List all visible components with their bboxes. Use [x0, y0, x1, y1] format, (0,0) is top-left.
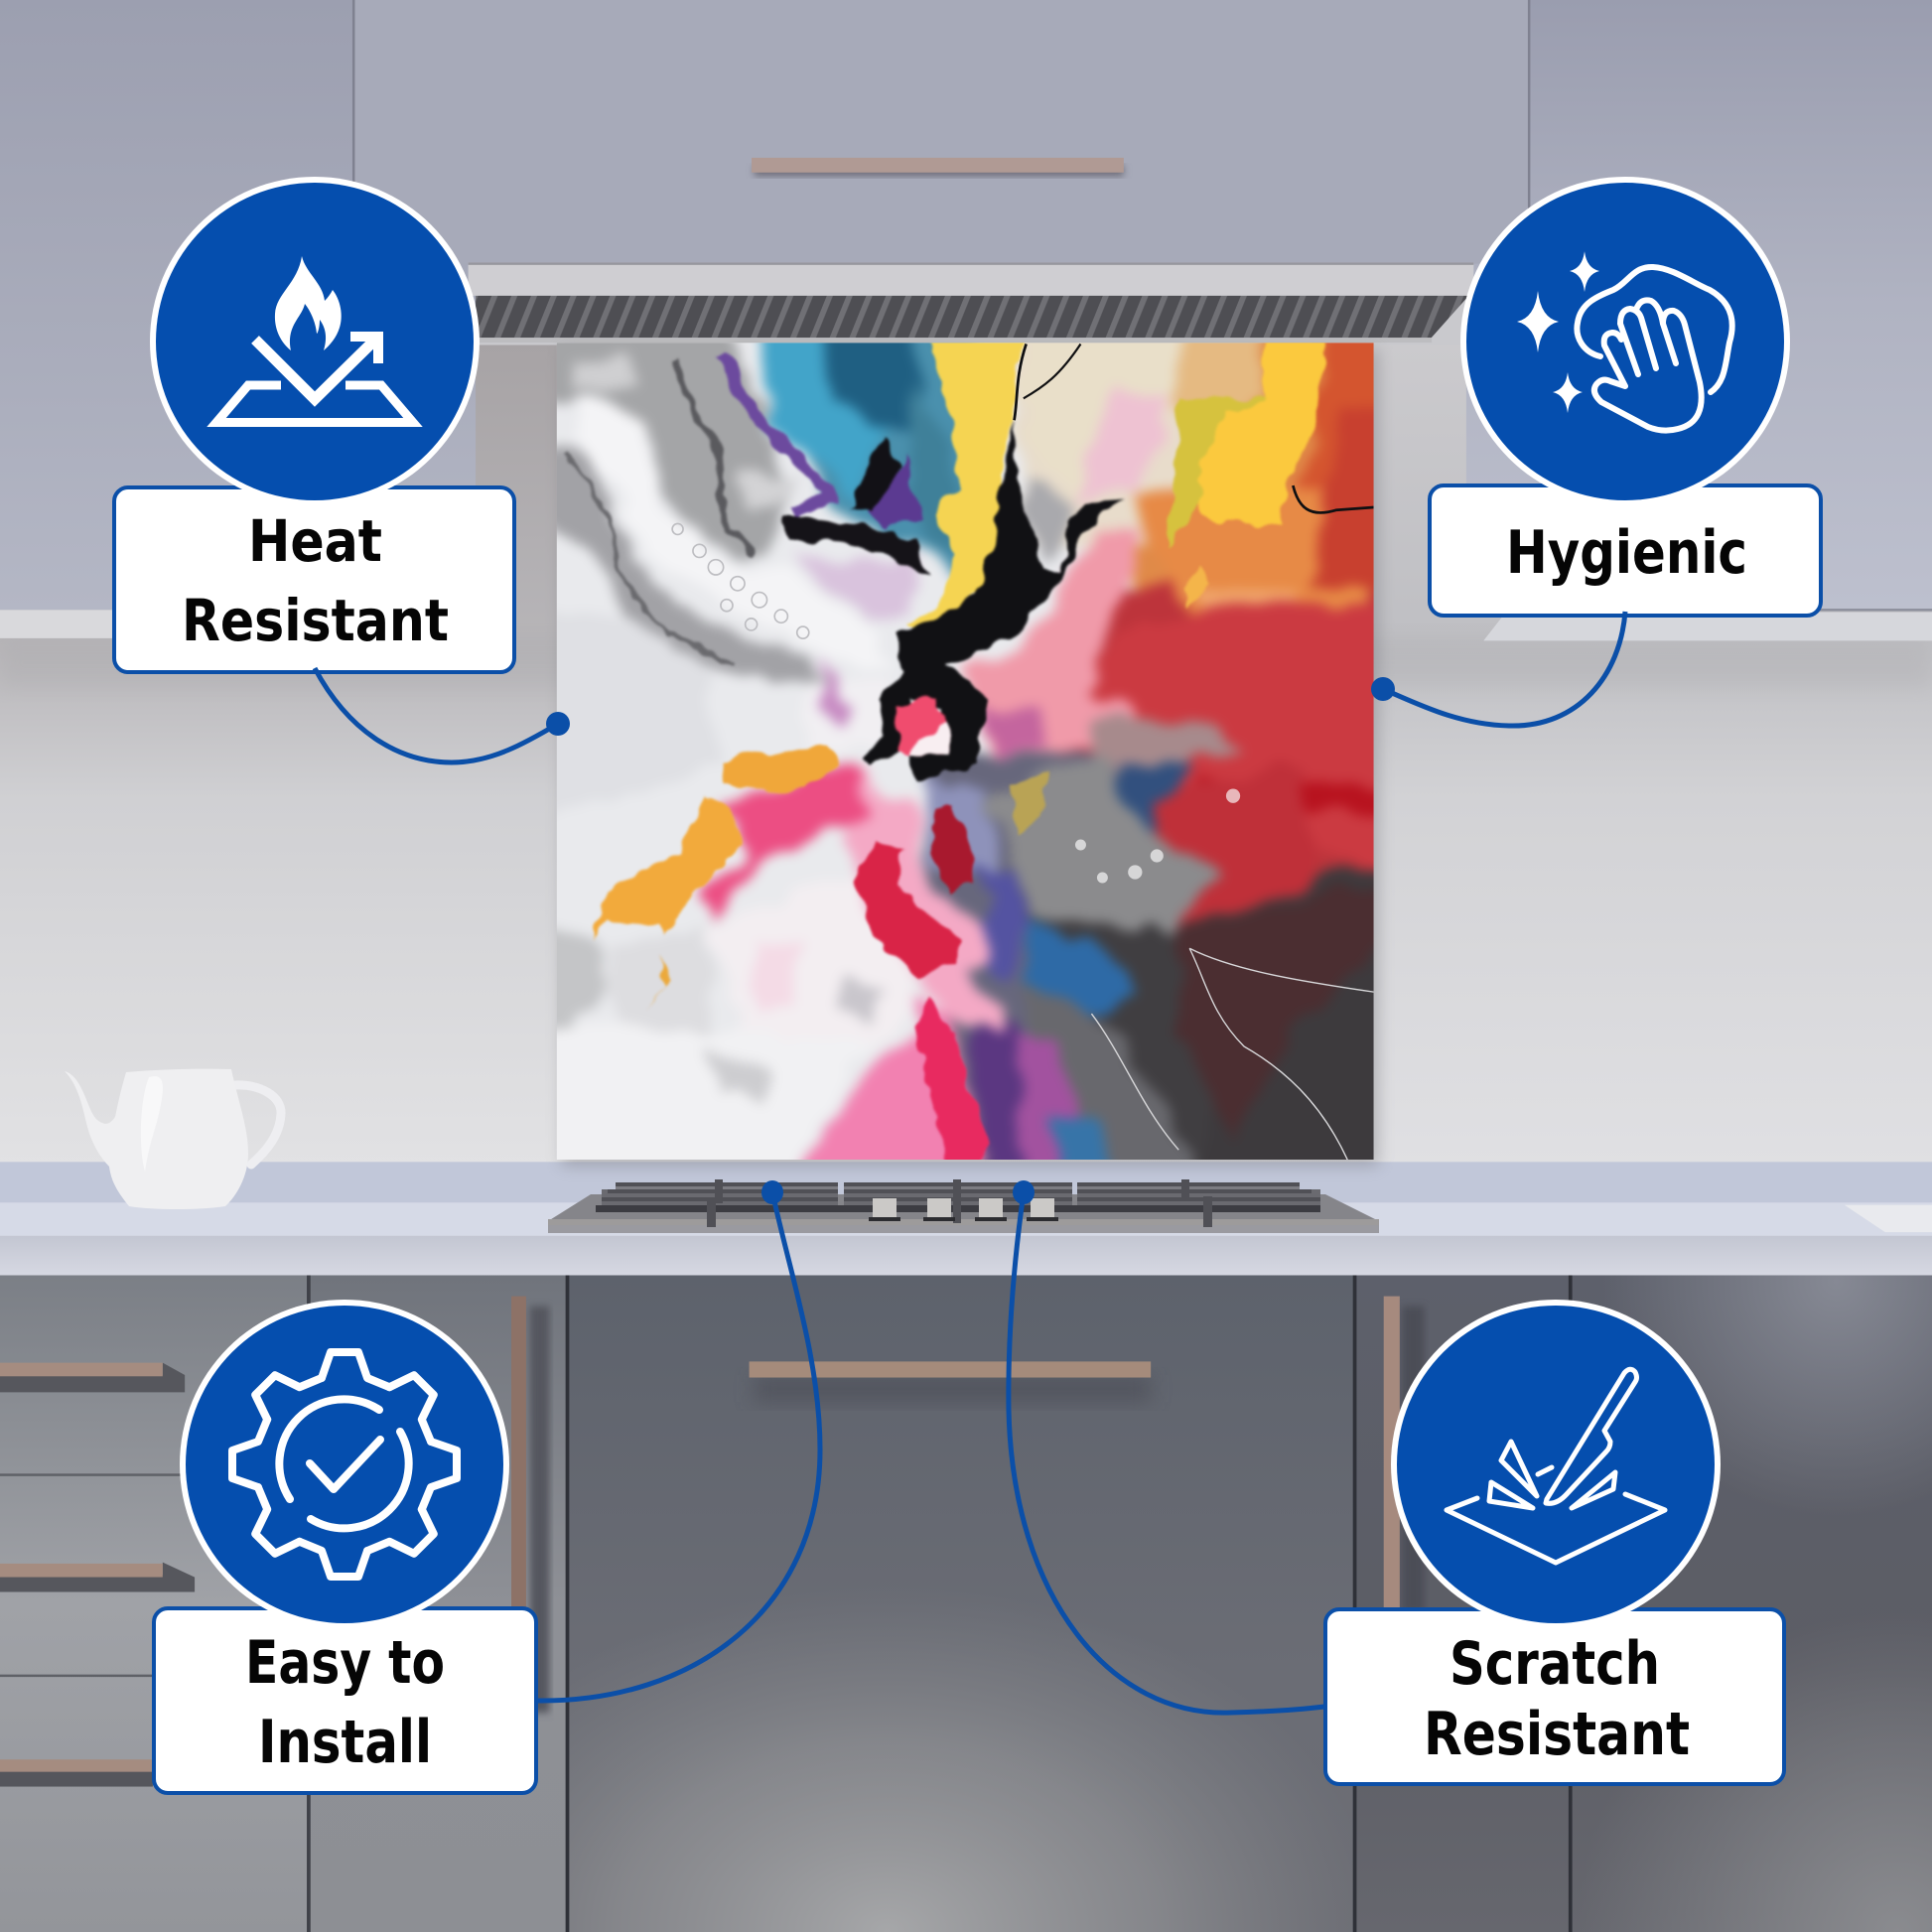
- label box: Hygienic: [1506, 518, 1747, 588]
- painting: sharp pours and veins: [563, 306, 1331, 1210]
- icon: knife scratching surface: [1391, 1300, 1721, 1629]
- countertop: [0, 1162, 1932, 1276]
- label box: Resistant: [1424, 1700, 1690, 1769]
- cooker hood: [469, 262, 1473, 343]
- label box: Resistant: [182, 587, 449, 654]
- icon: hand wiping with sparkles: [1460, 177, 1790, 506]
- upper cabinets: [0, 0, 1932, 640]
- label box: Heat: [248, 507, 382, 575]
- painting: large colour fields: [556, 343, 1374, 1160]
- connector arrow: [1371, 612, 1625, 726]
- connector arrow: [315, 668, 570, 762]
- icon: gear with check mark: [180, 1300, 509, 1629]
- hob: [548, 1179, 1379, 1233]
- callout: Hygienic: [1371, 177, 1821, 726]
- label box: [154, 1608, 536, 1793]
- label box: [1430, 485, 1821, 616]
- icon: flame on surface with deflection arrow: [150, 177, 480, 506]
- wall: [0, 345, 986, 1171]
- callout: Easy to Install: [154, 1180, 820, 1793]
- callout: Heat Resistant: [114, 177, 570, 762]
- connector arrow: [537, 1180, 820, 1701]
- wall cabinet handle: [752, 158, 1124, 176]
- painted glass splashback: [554, 343, 1386, 1173]
- callout: Scratch Resistant: [1009, 1180, 1784, 1784]
- label box: [114, 487, 514, 672]
- label box: Easy to: [245, 1628, 445, 1698]
- label box: Install: [258, 1708, 432, 1777]
- label box: Scratch: [1449, 1629, 1660, 1699]
- teapot: [65, 1069, 281, 1209]
- label box: [1325, 1609, 1784, 1784]
- connector arrow: [1009, 1180, 1324, 1713]
- base cabinets: [0, 1276, 1932, 1932]
